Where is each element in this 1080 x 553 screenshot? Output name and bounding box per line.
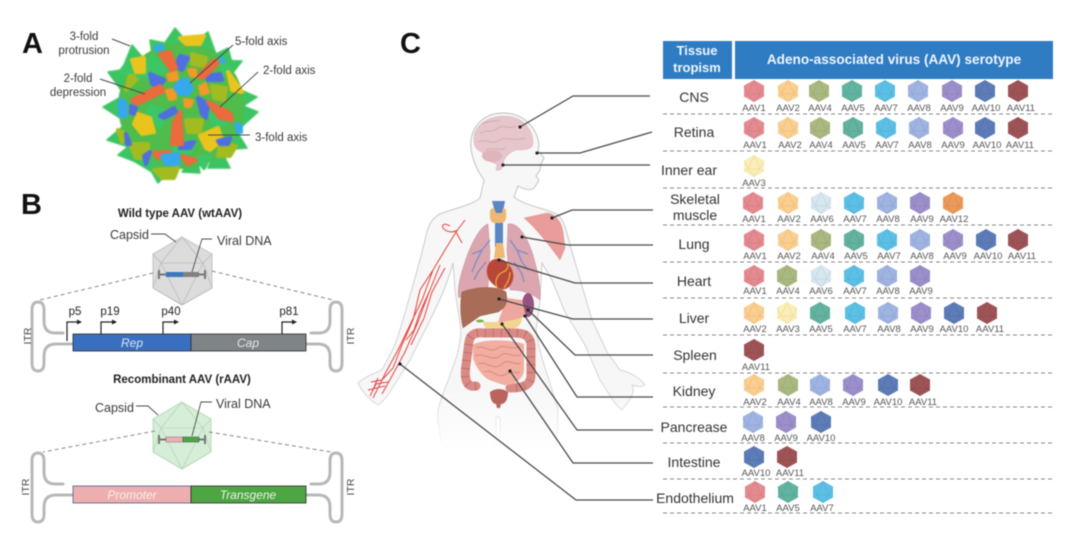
genome bar: Promoter and Transgene: Promoter xyxy=(107,488,158,502)
table header: AAV serotype xyxy=(735,41,1053,79)
human body illustration xyxy=(358,113,645,450)
row: Retina: AAV2 xyxy=(778,140,802,151)
promoter arrows: p5 xyxy=(69,306,81,318)
row: Lung: AAV1 xyxy=(743,251,767,262)
row: Liver: AAV8 xyxy=(877,324,901,335)
body silhouette xyxy=(358,113,645,450)
row: Retina: AAV4 xyxy=(809,140,833,151)
panel: A capsid structure xyxy=(22,28,316,183)
genome bar: Rep and Cap: Cap xyxy=(237,336,259,350)
icon: green capsid xyxy=(153,402,211,469)
row: Skeletal muscle xyxy=(670,191,968,225)
callouts: capsid features: 3-fold axis xyxy=(255,132,308,144)
row: Heart: AAV4 xyxy=(776,286,800,297)
sub-panel: recombinant AAV xyxy=(20,374,357,522)
row: Skeletal muscle: AAV12 xyxy=(940,214,968,225)
row: CNS: AAV1 xyxy=(742,103,766,114)
row: Endothelium xyxy=(656,481,834,514)
callouts: capsid features: 2-fold xyxy=(64,73,92,85)
row: Lung: AAV8 xyxy=(910,251,934,262)
ITR hairpins: ITR xyxy=(345,478,357,495)
callouts: capsid features: protrusion xyxy=(58,45,110,57)
promoter arrows xyxy=(67,306,299,341)
row: Skeletal muscle: AAV7 xyxy=(843,214,867,225)
row: Lung: AAV10 xyxy=(974,251,1002,262)
row: Lung xyxy=(678,229,1036,262)
callouts: capsid features: depression xyxy=(50,87,106,99)
row: Endothelium: AAV5 xyxy=(776,503,800,514)
row: Kidney: AAV9 xyxy=(842,397,866,408)
row: Retina: AAV7 xyxy=(875,140,899,151)
sub-panel: wild type AAV: Capsid xyxy=(110,228,149,242)
row: Liver: Liver xyxy=(679,310,710,326)
row: Lung: AAV11 xyxy=(1008,251,1036,262)
organ: pancreas xyxy=(483,318,522,332)
promoter arrows: p19 xyxy=(100,306,120,318)
ITR hairpins: ITR xyxy=(345,327,357,344)
genome bar: Rep and Cap: Rep xyxy=(121,336,143,350)
ITR hairpins xyxy=(20,453,357,522)
row: Heart xyxy=(677,265,933,297)
row: Lung: AAV5 xyxy=(844,251,868,262)
row: Spleen: AAV11 xyxy=(742,362,770,373)
row: Spleen xyxy=(673,339,770,373)
row: Skeletal muscle: AAV6 xyxy=(810,214,834,225)
genome bar: Promoter and Transgene xyxy=(73,486,306,503)
organ: large intestine xyxy=(465,333,531,388)
row: Skeletal muscle: AAV9 xyxy=(910,214,934,225)
row: Lung: AAV4 xyxy=(811,251,835,262)
row: Pancreas: AAV10 xyxy=(807,433,835,444)
sub-panel: wild type AAV: Wild type AAV (wtAAV) xyxy=(118,208,242,220)
ITR hairpins: ITR xyxy=(22,327,34,344)
organ: bronchi xyxy=(472,240,528,282)
organ: liver xyxy=(461,288,507,328)
row: CNS: AAV10 xyxy=(972,103,1000,114)
promoter arrows: p81 xyxy=(279,306,299,318)
leader lines from organs to tissue labels xyxy=(398,96,653,500)
row: Retina xyxy=(674,117,1034,151)
row: Inner ear: AAV3 xyxy=(742,178,766,189)
organ: bladder xyxy=(490,389,508,408)
row: Retina: AAV8 xyxy=(908,140,932,151)
row: Endothelium: AAV1 xyxy=(743,503,767,514)
organ: spleen xyxy=(522,293,534,317)
promoter arrows: p40 xyxy=(161,306,181,318)
row: CNS: AAV5 xyxy=(841,103,865,114)
panel: B genome organisation xyxy=(20,189,357,522)
row: Liver: AAV11 xyxy=(976,324,1004,335)
row: Liver: AAV3 xyxy=(776,324,800,335)
row: Kidney: AAV4 xyxy=(777,397,801,408)
organ: thyroid xyxy=(490,208,506,258)
row: CNS: AAV8 xyxy=(907,103,931,114)
row: Heart: AAV7 xyxy=(843,286,867,297)
row: Pancreas xyxy=(661,411,835,444)
row: Pancreas: Pancrease xyxy=(661,419,728,435)
row: Kidney: AAV11 xyxy=(909,397,937,408)
row: Heart: AAV6 xyxy=(809,286,833,297)
genome bar: Promoter and Transgene: Transgene xyxy=(220,488,277,502)
row: Heart: AAV8 xyxy=(876,286,900,297)
heading: B: B xyxy=(21,189,42,221)
callouts: capsid features: 5-fold axis xyxy=(235,36,288,48)
row: Kidney: AAV10 xyxy=(874,397,902,408)
row: Lung: Lung xyxy=(678,236,710,252)
row: Endothelium: AAV7 xyxy=(810,503,834,514)
sub-panel: recombinant AAV: Recombinant AAV (rAAV) xyxy=(113,374,251,386)
row: CNS: AAV9 xyxy=(940,103,964,114)
row: Intestine: Intestine xyxy=(668,454,721,470)
table header: AAV serotype: Adeno-associated virus (AAV) serotype xyxy=(767,52,1022,67)
capsid surface model xyxy=(103,28,258,183)
sub-panel: recombinant AAV: Capsid xyxy=(95,401,134,415)
sub-panel: recombinant AAV: Viral DNA xyxy=(216,397,271,411)
row: CNS: AAV7 xyxy=(874,103,898,114)
ITR hairpins: ITR xyxy=(20,478,32,495)
row: Pancreas: AAV9 xyxy=(774,433,798,444)
row: Retina: AAV5 xyxy=(842,140,866,151)
row: CNS: AAV2 xyxy=(776,103,800,114)
row: Pancreas: AAV8 xyxy=(741,433,765,444)
sub-panel: wild type AAV xyxy=(22,208,357,371)
table header: tissue tropism: Tissue xyxy=(677,43,717,58)
row: Skeletal muscle: AAV1 xyxy=(742,214,766,225)
row: Heart: Heart xyxy=(677,273,711,289)
organ: heart xyxy=(487,259,513,289)
organ: arteries xyxy=(368,220,465,398)
row: Kidney xyxy=(673,374,937,408)
row: Inner ear: Inner ear xyxy=(661,162,717,178)
row: CNS xyxy=(679,80,1035,114)
row: Retina: AAV1 xyxy=(743,140,767,151)
row: Intestine: AAV10 xyxy=(742,468,770,479)
row: CNS: AAV11 xyxy=(1007,103,1035,114)
sub-panel: wild type AAV: Viral DNA xyxy=(217,234,272,248)
callouts: capsid features xyxy=(50,31,316,144)
row: Inner ear xyxy=(661,155,766,189)
row: Kidney: Kidney xyxy=(673,383,715,399)
row: Retina: AAV11 xyxy=(1006,140,1034,151)
organ: stomach xyxy=(498,298,526,322)
row: Skeletal muscle: AAV2 xyxy=(777,214,801,225)
row: Endothelium: Endothelium xyxy=(656,490,734,506)
row: Skeletal muscle: Skeletal xyxy=(670,191,720,207)
row: Liver: AAV2 xyxy=(743,324,767,335)
organ: trachea xyxy=(492,201,505,247)
row: Liver: AAV7 xyxy=(843,324,867,335)
row: Lung: AAV9 xyxy=(943,251,967,262)
table header: tissue tropism: tropism xyxy=(673,60,721,75)
row: Skeletal muscle: muscle xyxy=(673,207,717,223)
row: Lung: AAV7 xyxy=(877,251,901,262)
genome bar: Rep and Cap xyxy=(73,334,306,351)
row: Liver: AAV10 xyxy=(940,324,968,335)
row: Liver: AAV9 xyxy=(910,324,934,335)
organ: lungs xyxy=(458,224,540,300)
row: Kidney: AAV8 xyxy=(809,397,833,408)
row: Intestine xyxy=(668,446,804,479)
organ: deltoid muscle xyxy=(524,213,565,260)
table header: tissue tropism xyxy=(663,41,732,79)
row: Lung: AAV2 xyxy=(777,251,801,262)
callouts: capsid features: 2-fold axis xyxy=(263,65,316,77)
organ: brain xyxy=(474,116,533,170)
row: Kidney: AAV2 xyxy=(743,397,767,408)
row: Intestine: AAV11 xyxy=(776,468,804,479)
row: Skeletal muscle: AAV8 xyxy=(876,214,900,225)
row: Spleen: Spleen xyxy=(673,347,717,363)
row: Liver xyxy=(679,302,1004,335)
row: CNS: AAV4 xyxy=(808,103,832,114)
row: Heart: AAV1 xyxy=(743,286,767,297)
row: Retina: AAV9 xyxy=(941,140,965,151)
icon: grey capsid xyxy=(153,237,212,305)
row: Heart: AAV9 xyxy=(909,286,933,297)
organ: small intestine xyxy=(473,340,524,385)
callouts: capsid features: 3-fold xyxy=(70,31,98,43)
row: Liver: AAV5 xyxy=(809,324,833,335)
row: Retina: AAV10 xyxy=(973,140,1001,151)
heading: C: C xyxy=(400,28,421,60)
organ: gallbladder xyxy=(476,320,484,322)
ITR hairpins xyxy=(22,302,357,371)
row: CNS: CNS xyxy=(679,89,709,105)
panel: C tissue tropism xyxy=(358,28,1053,514)
heading: A: A xyxy=(22,28,43,60)
row: Retina: Retina xyxy=(674,124,714,140)
